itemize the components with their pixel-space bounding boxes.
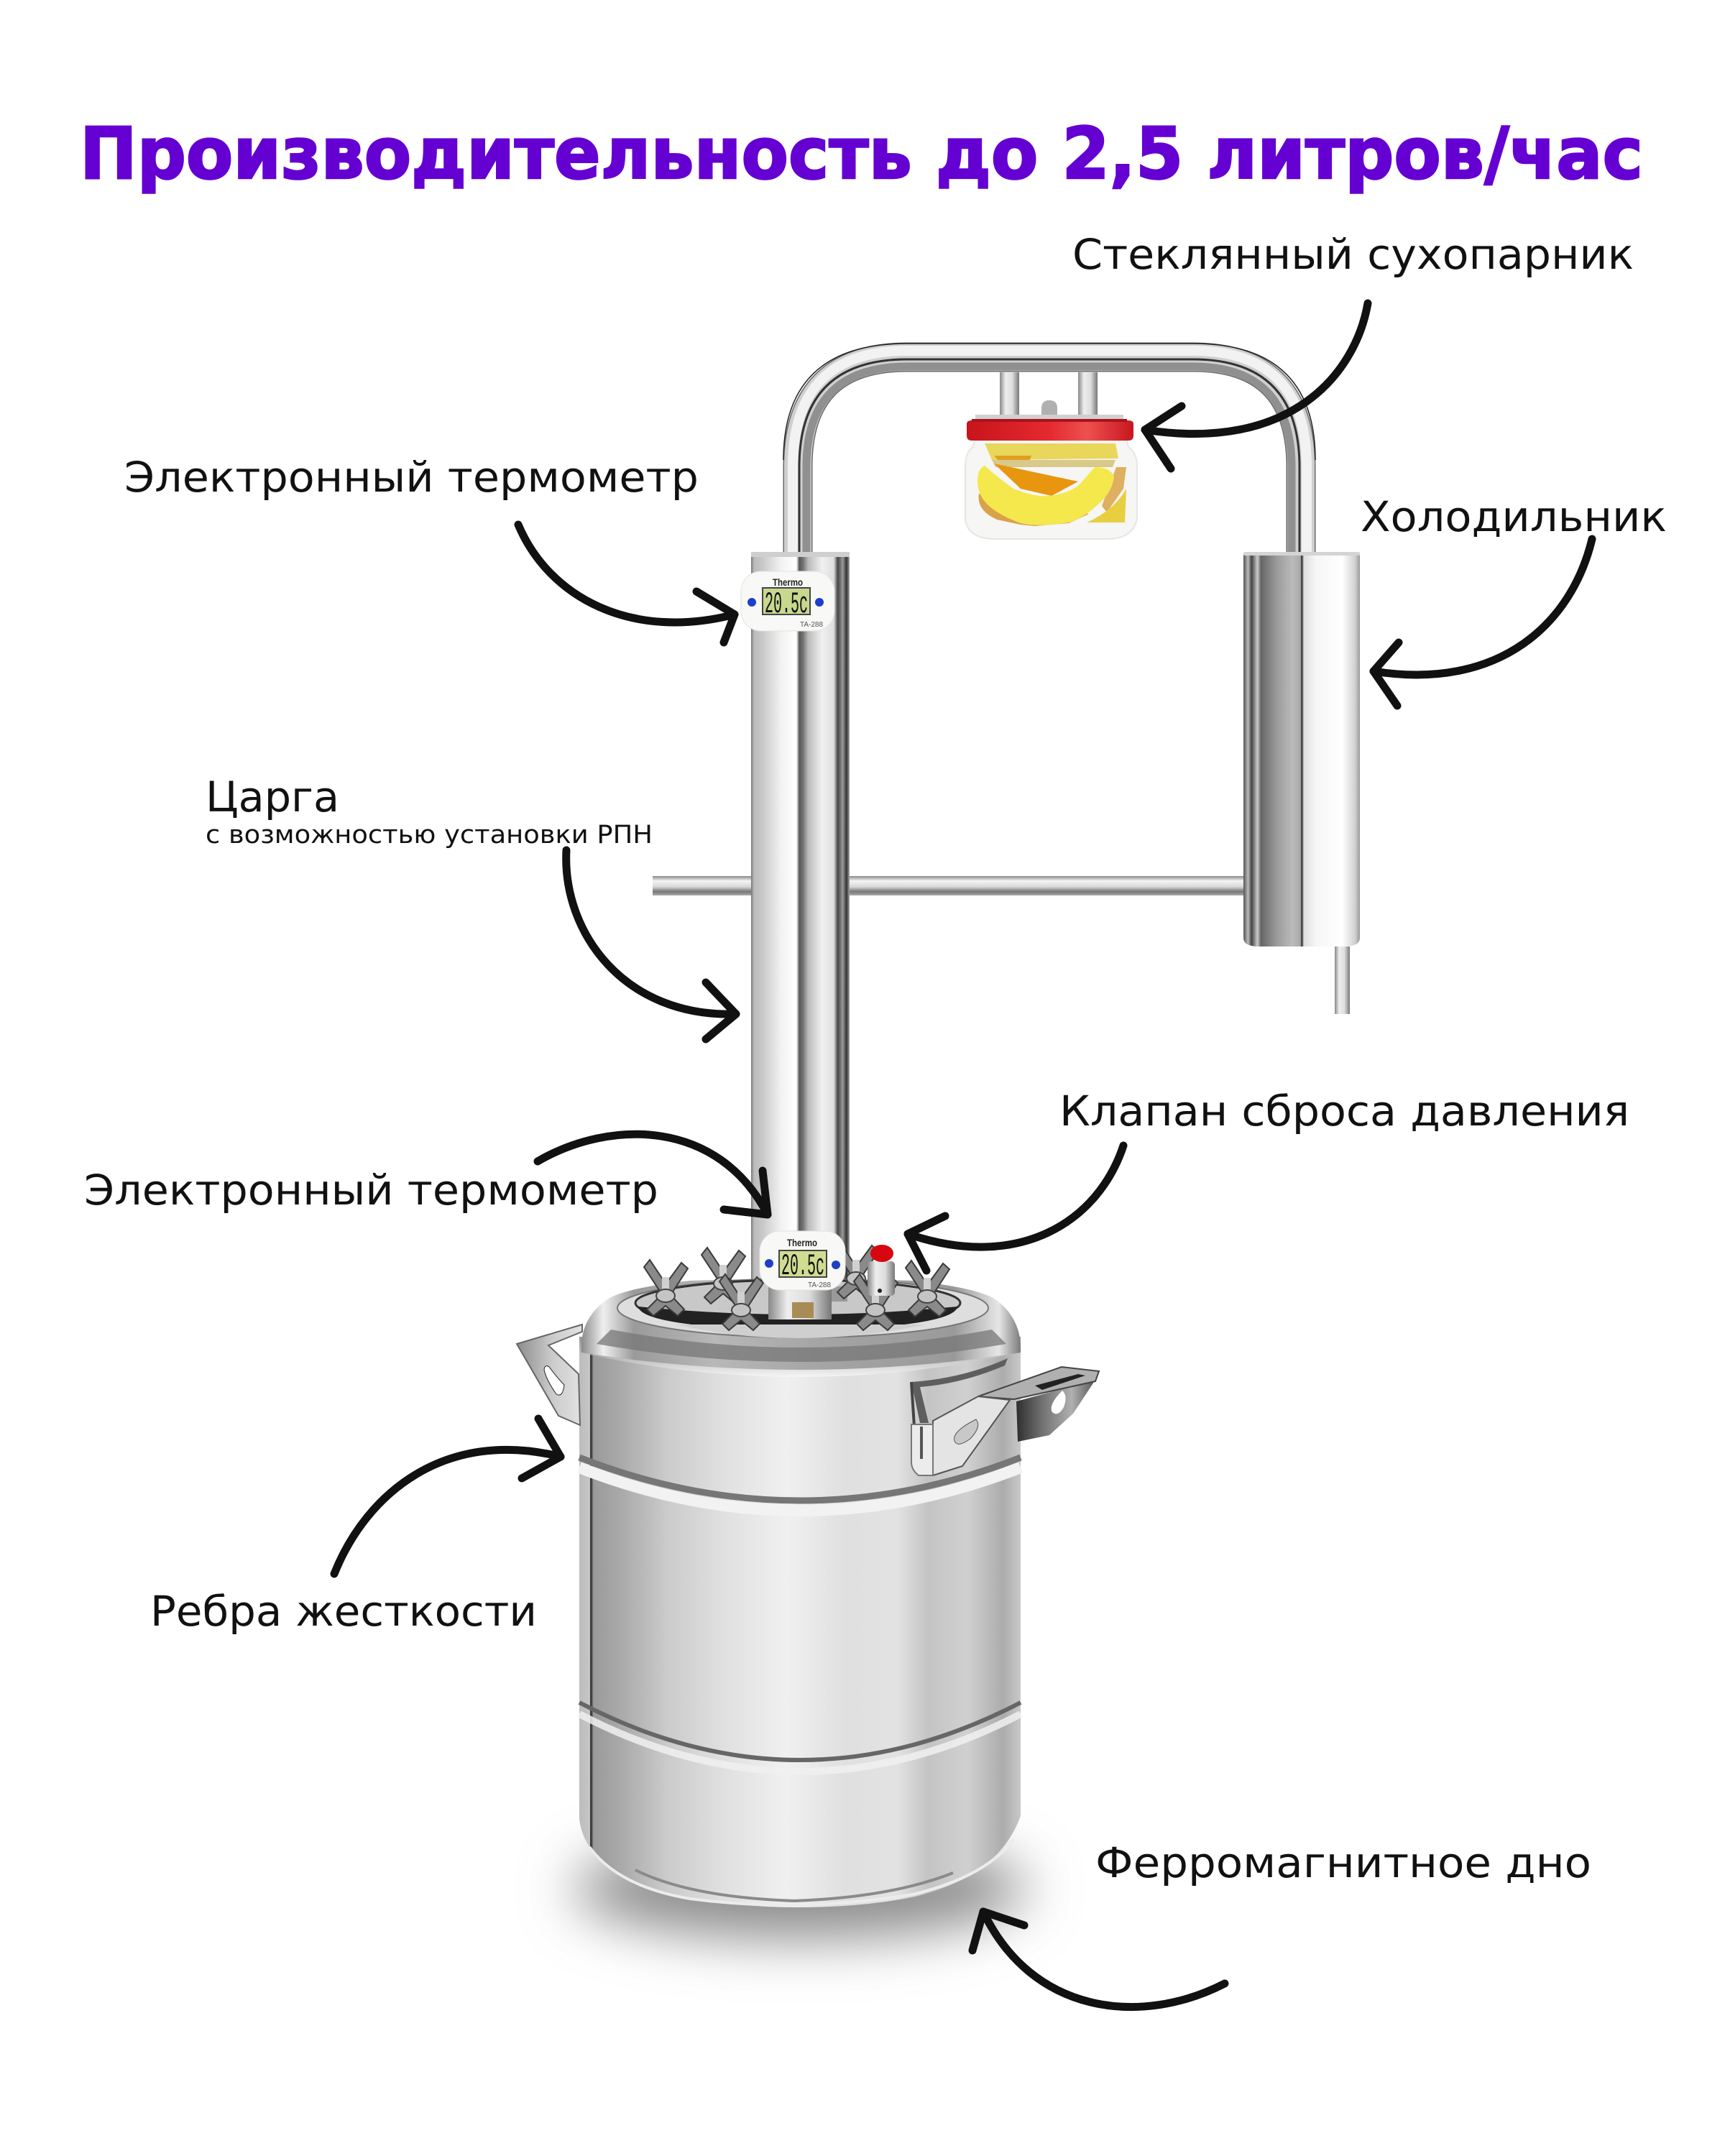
arrow: condenser	[1374, 539, 1592, 706]
column base	[768, 1286, 847, 1319]
distiller apparatus	[517, 344, 1360, 1939]
arrow: lower thermometer	[538, 1134, 768, 1215]
arrow: ferromagnetic bottom	[972, 1912, 1225, 2007]
label: condenser: Холодильник	[1361, 492, 1667, 541]
wing nuts	[644, 1243, 949, 1330]
left handle	[517, 1325, 582, 1425]
label: column with reflux note: с возможностью установки РПН	[206, 821, 653, 849]
label: lower electronic thermometer: Электронный термометр	[84, 1166, 658, 1215]
right handle	[911, 1358, 1099, 1475]
label: column with reflux note: Царга	[206, 773, 339, 821]
label: glass steam trap: Стеклянный сухопарник	[1072, 230, 1634, 279]
top thermometer: TA-288	[800, 621, 823, 629]
label: ferromagnetic bottom: Ферромагнитное дно	[1095, 1838, 1591, 1887]
label: top electronic thermometer: Электронный термометр	[124, 453, 699, 502]
upper rib	[579, 1457, 1021, 1511]
arched vapour pipe	[783, 344, 1315, 561]
title: Производительность до 2,5 литров/час	[80, 113, 1643, 195]
arrow: pressure relief valve	[908, 1146, 1123, 1271]
bottom thermometer: 20.5c	[781, 1249, 824, 1284]
drain pipe	[1335, 946, 1350, 1014]
horizontal cooling pipe	[653, 876, 1248, 895]
arrow: column	[566, 850, 736, 1039]
condenser	[1243, 552, 1360, 1014]
pot lid	[581, 1278, 1021, 1370]
pot body	[579, 1337, 1021, 1907]
pressure relief valve	[868, 1245, 895, 1296]
top thermometer	[741, 571, 834, 631]
glass jar with lemon peel	[965, 372, 1137, 539]
bottom thermometer: Thermo	[787, 1237, 817, 1248]
column	[751, 552, 850, 1295]
bottom thermometer	[760, 1231, 845, 1290]
shoulder highlight	[579, 1337, 1021, 1377]
label: stiffening ribs: Ребра жесткости	[150, 1587, 537, 1636]
floor shadow	[574, 1838, 1026, 1939]
arrow: top thermometer	[518, 525, 735, 642]
top thermometer: 20.5c	[765, 587, 808, 622]
lower rib	[579, 1703, 1021, 1772]
lower pot rim	[589, 1840, 1013, 1905]
label: column with reflux note	[206, 773, 653, 849]
bottom thermometer: TA-288	[808, 1281, 831, 1289]
label: pressure relief valve: Клапан сброса давления	[1059, 1087, 1629, 1135]
top thermometer: Thermo	[773, 576, 803, 588]
arrow: glass steam trap	[1145, 303, 1368, 469]
arrow: stiffening ribs	[334, 1419, 561, 1574]
